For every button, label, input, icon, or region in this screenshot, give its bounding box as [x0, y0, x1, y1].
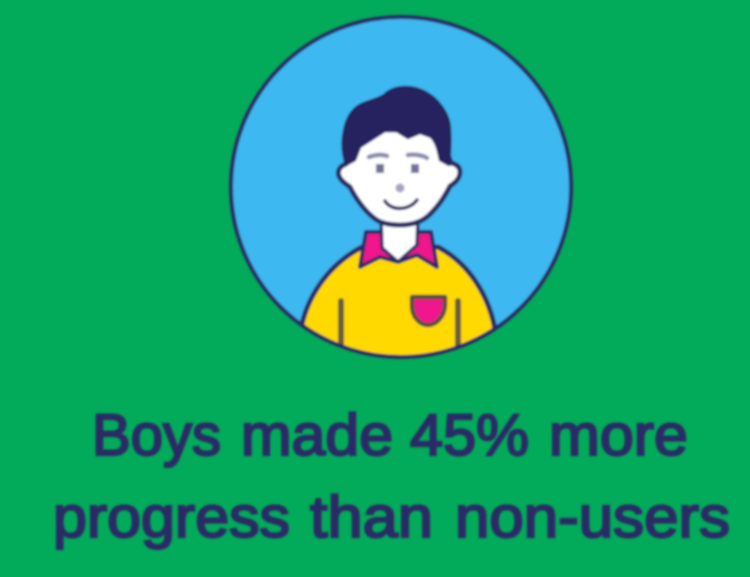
hair	[343, 87, 450, 165]
caption line 1: made	[241, 403, 393, 468]
circle outline	[231, 17, 571, 357]
neck	[381, 220, 418, 262]
caption line 1: 45%	[410, 403, 529, 468]
caption line 1	[92, 403, 688, 468]
eyebrows and eyes	[369, 155, 427, 158]
caption line 1: Boys	[92, 403, 221, 468]
shirt pocket	[412, 297, 445, 325]
boy figure	[300, 87, 496, 370]
icon: boy portrait in circle	[231, 17, 571, 370]
caption	[53, 403, 730, 550]
smile	[385, 200, 417, 208]
face	[338, 130, 460, 225]
shirt sleeve lines	[341, 301, 458, 347]
caption line 1: more	[549, 403, 688, 468]
nose	[396, 184, 404, 192]
caption line 2: non-users	[455, 485, 730, 550]
yellow shirt	[300, 247, 496, 370]
pink collar	[360, 232, 437, 267]
caption line 2	[53, 485, 730, 550]
caption line 2: than	[310, 485, 433, 550]
caption line 2: progress	[53, 485, 290, 550]
icon: blue circle	[231, 17, 571, 357]
